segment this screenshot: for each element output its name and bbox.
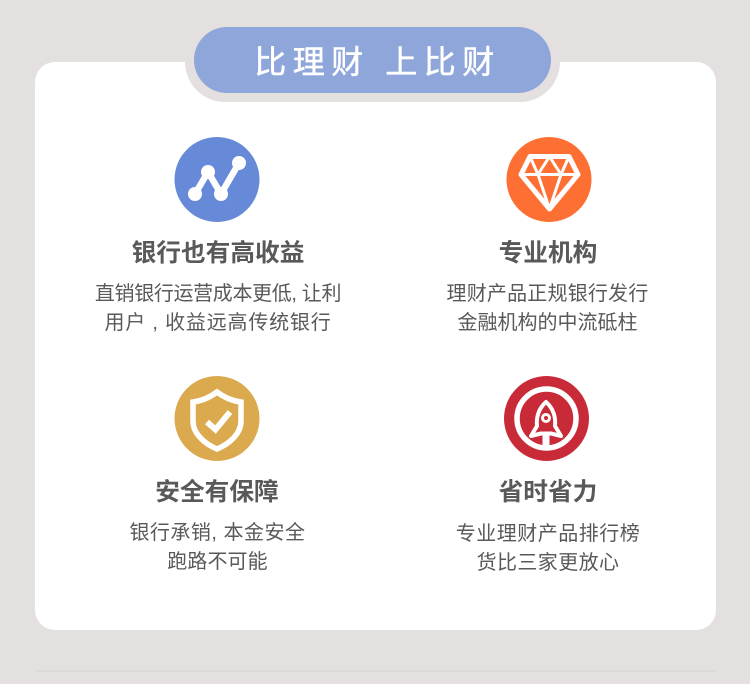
icon: diamond bbox=[506, 137, 592, 222]
text: safety description: 银行承销, 本金安全 bbox=[129, 522, 306, 544]
text: professional institution description: 金融机构的中流砥柱 bbox=[458, 312, 638, 334]
icon: line chart bbox=[174, 137, 260, 222]
header pill border bbox=[185, 40, 560, 102]
text: saves effort description: 专业理财产品排行榜 bbox=[456, 523, 640, 545]
text: bank yields description: 直销银行运营成本更低, 让利 bbox=[95, 283, 341, 305]
heading: bank yields: 银行也有高收益 bbox=[132, 240, 304, 267]
heading: safety: 安全有保障 bbox=[155, 479, 279, 506]
text: saves effort description: 货比三家更放心 bbox=[477, 552, 619, 574]
header pill bbox=[194, 27, 551, 93]
text: saves effort description bbox=[456, 523, 640, 574]
white card panel bbox=[34, 62, 716, 630]
text: safety description: 跑路不可能 bbox=[167, 551, 268, 573]
text: bank yields description bbox=[95, 283, 341, 334]
icon: rocket bbox=[504, 376, 589, 461]
footer divider bbox=[35, 670, 715, 672]
text: professional institution description: 理财产品正规银行发行 bbox=[446, 283, 648, 305]
heading: saves effort: 省时省力 bbox=[499, 479, 597, 506]
text: bank yields description: 用户 , 收益远高传统银行 bbox=[104, 312, 332, 334]
text: professional institution description bbox=[446, 283, 648, 334]
text: safety description bbox=[129, 522, 306, 573]
icon: shield bbox=[174, 376, 260, 461]
heading: professional institution: 专业机构 bbox=[499, 240, 597, 267]
title: 比理财 上比财 bbox=[254, 44, 501, 80]
